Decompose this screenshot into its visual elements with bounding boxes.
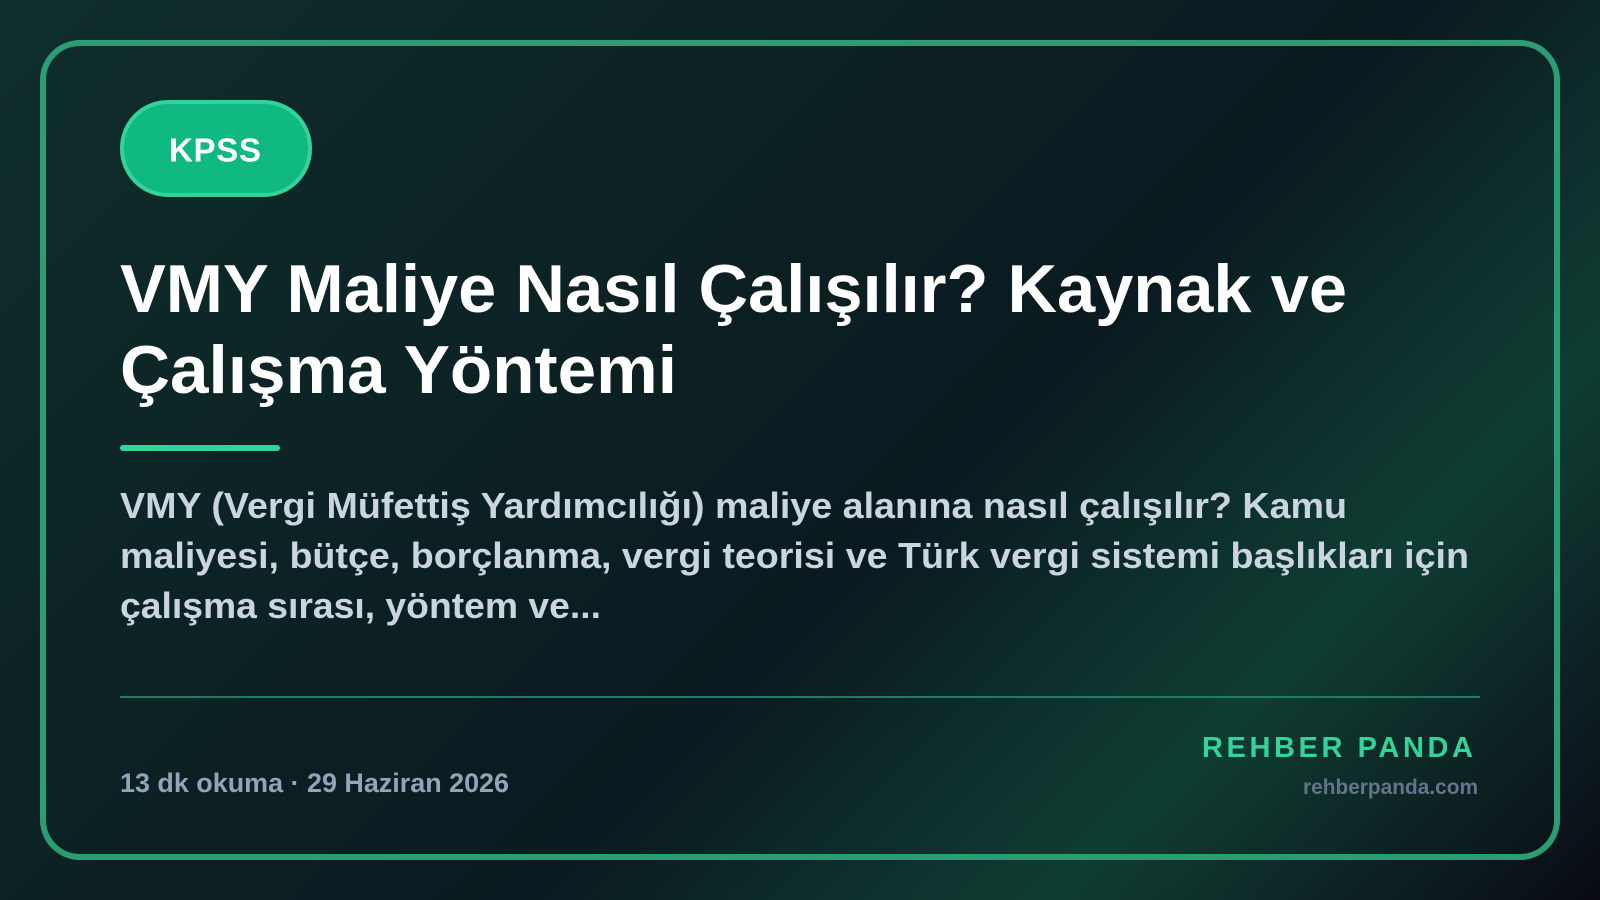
category badge: KPSS (169, 132, 261, 168)
footer divider (120, 696, 1480, 698)
title (120, 251, 1347, 408)
description (120, 485, 1469, 626)
reading time and date: 13 dk okuma · 29 Haziran 2026 (120, 768, 509, 798)
description: VMY (Vergi Müfettiş Yardımcılığı) maliye alanına nasıl çalışılır? Kamu (120, 485, 1347, 526)
website: rehberpanda.com (1303, 776, 1478, 799)
description: maliyesi, bütçe, borçlanma, vergi teorisi ve Türk vergi sistemi başlıkları için (120, 535, 1469, 576)
description: çalışma sırası, yöntem ve... (120, 585, 601, 626)
category badge (122, 102, 310, 195)
title: Çalışma Yöntemi (120, 332, 677, 408)
title: VMY Maliye Nasıl Çalışılır? Kaynak ve (120, 251, 1347, 327)
brand name: REHBER PANDA (1202, 732, 1473, 764)
accent bar (120, 445, 280, 451)
